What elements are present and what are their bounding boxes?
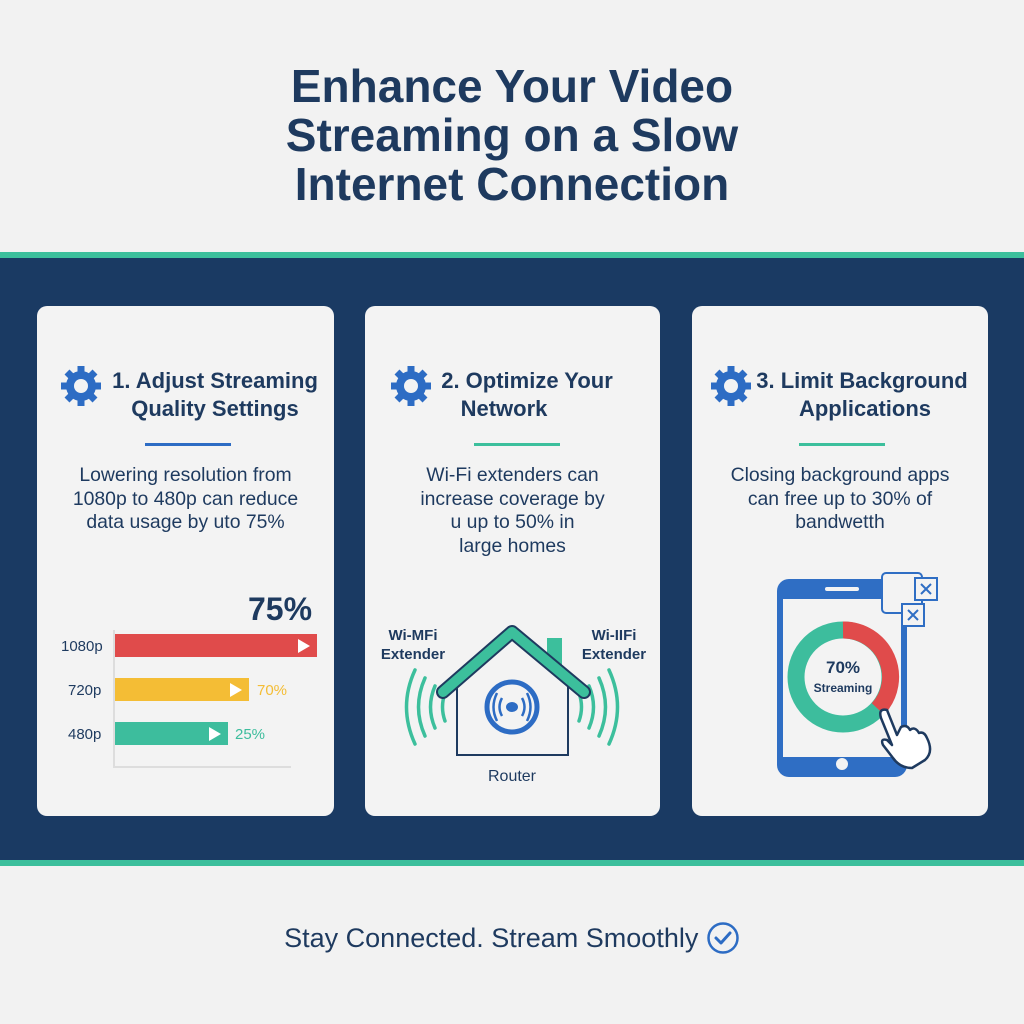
- bar chart: 720p: [68, 682, 101, 699]
- title: [286, 60, 738, 210]
- heading 1: Quality Settings: [131, 396, 299, 421]
- text 3: bandwetth: [795, 511, 885, 533]
- heading 1: 1. Adjust Streaming: [112, 368, 318, 393]
- heading 2: [441, 368, 613, 421]
- text 1: 1080p to 480p can reduce: [73, 488, 298, 510]
- phone donut graphic: [777, 572, 938, 777]
- router diagram: Wi-IIFi: [592, 627, 636, 644]
- navy band: [0, 258, 1024, 860]
- text 3: [731, 464, 949, 533]
- heading 1: [112, 368, 318, 421]
- icon: gear 1: [61, 366, 101, 406]
- phone donut graphic: Streaming: [814, 681, 872, 695]
- text 2: large homes: [459, 534, 566, 556]
- text 3: can free up to 30% of: [748, 488, 932, 510]
- title: Enhance Your Video: [291, 60, 733, 112]
- panel: background apps: [692, 306, 988, 816]
- bar chart: 1080p: [61, 638, 103, 655]
- text 3: Closing background apps: [731, 464, 949, 486]
- heading 3: [756, 368, 968, 421]
- bar chart: 75%: [248, 591, 312, 627]
- bar chart: 70%: [257, 682, 287, 699]
- text 2: [420, 464, 605, 556]
- text 1: data usage by uto 75%: [86, 511, 285, 533]
- bar chart: [61, 591, 317, 768]
- heading 2: 2. Optimize Your: [441, 368, 613, 393]
- router diagram: Router: [488, 768, 537, 785]
- text 2: u up to 50% in: [450, 511, 574, 533]
- router diagram: Wi-MFi: [388, 627, 438, 644]
- icon: gear 2: [391, 366, 431, 406]
- icon: gear 3: [711, 366, 751, 406]
- heading 2: Network: [461, 396, 547, 421]
- text 2: Wi-Fi extenders can: [426, 464, 599, 486]
- router diagram: [381, 625, 646, 785]
- heading 3: 3. Limit Background: [756, 368, 968, 393]
- text 1: Lowering resolution from: [79, 464, 292, 486]
- heading 3: Applications: [799, 396, 931, 421]
- panel: network: [365, 306, 660, 816]
- title: Streaming on a Slow: [286, 109, 738, 161]
- text 2: increase coverage by: [420, 488, 605, 510]
- bar chart: 480p: [68, 726, 101, 743]
- phone donut graphic: 70%: [826, 658, 860, 677]
- panel: streaming quality: [37, 306, 334, 816]
- title: Internet Connection: [295, 158, 729, 210]
- text 1: [73, 464, 298, 533]
- bar chart: 25%: [235, 726, 265, 743]
- router diagram: Extender: [582, 646, 646, 663]
- router diagram: Extender: [381, 646, 445, 663]
- footer tagline: Stay Connected. Stream Smoothly: [284, 923, 698, 953]
